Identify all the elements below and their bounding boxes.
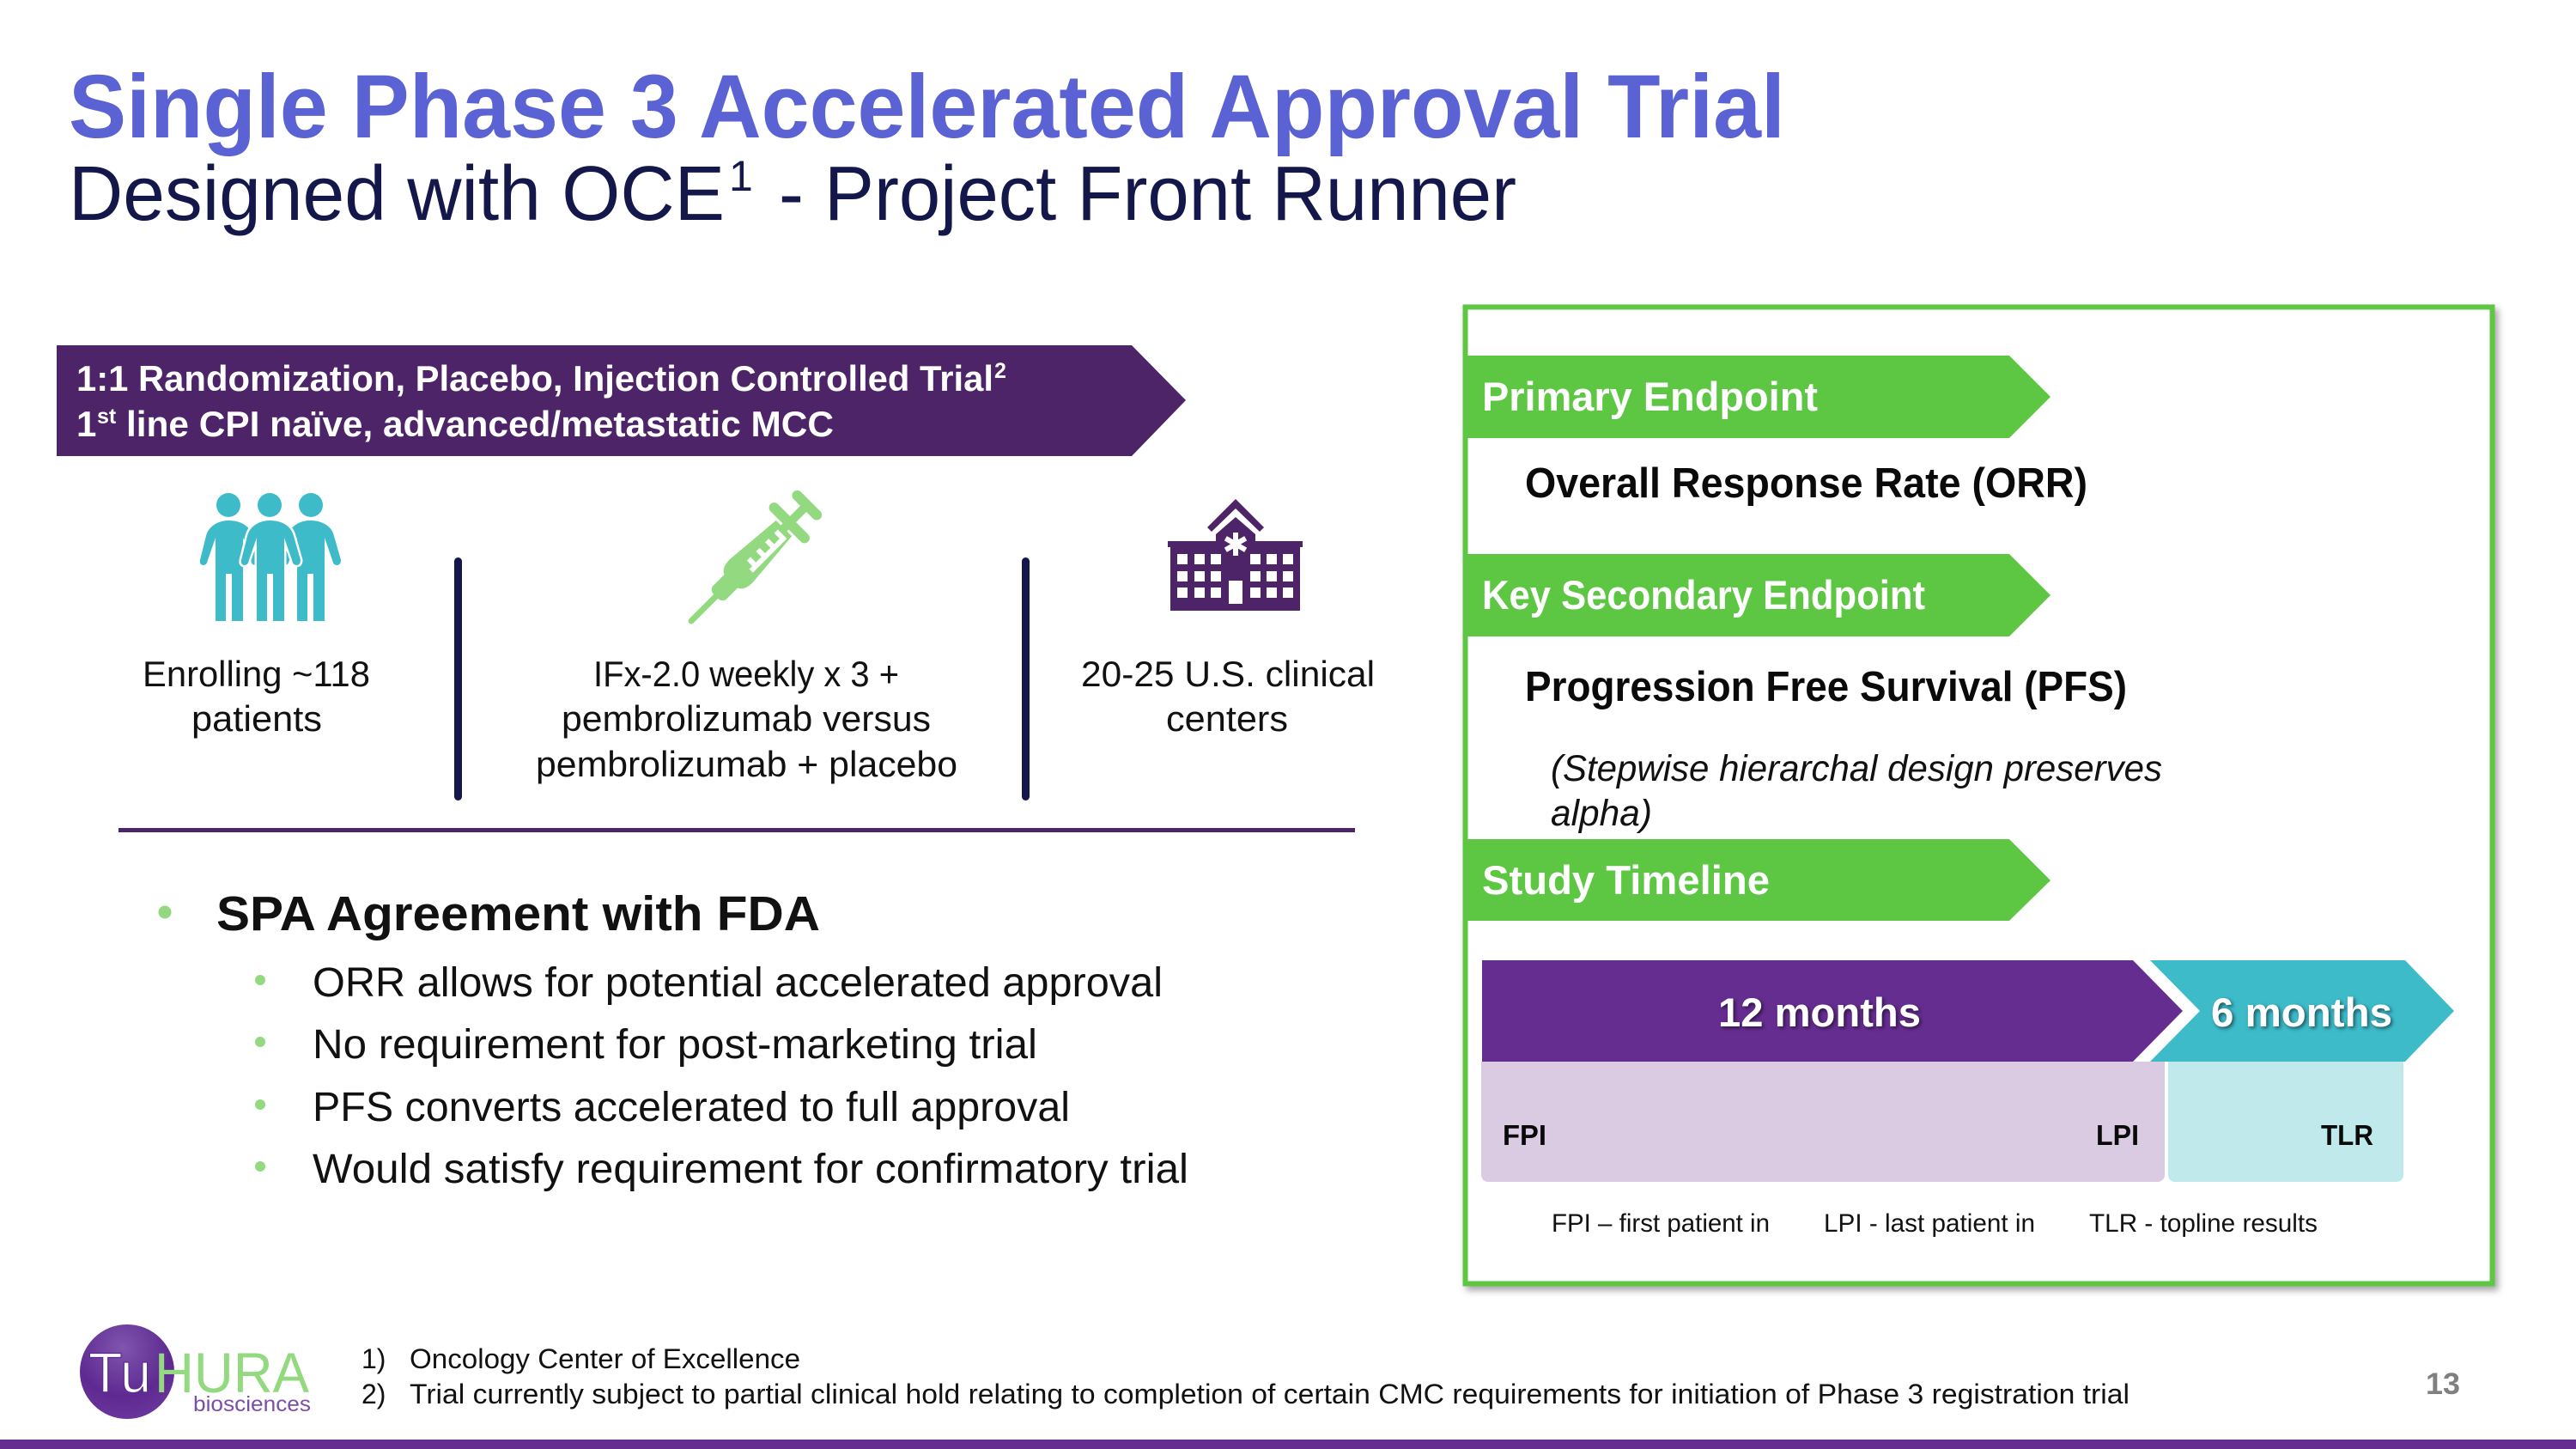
timeline: milestone bands: LPI: [2096, 1119, 2139, 1151]
icon: syringe: [671, 483, 829, 642]
label: treatment: [536, 654, 957, 784]
bullet list: SPA agreement: [158, 886, 1188, 1192]
label: enrolling: [143, 654, 370, 739]
label: enrolling: patients: [191, 698, 322, 739]
footnotes: 2): [361, 1379, 386, 1409]
subtitle: 1: [729, 152, 753, 200]
timeline: 12 months arrow: 12 months: [1718, 989, 1921, 1035]
icon: hospital: [1168, 499, 1303, 611]
bullet list: SPA agreement: PFS converts accelerated to full approval: [313, 1085, 1070, 1130]
secondary endpoint note: alpha): [1551, 793, 1652, 834]
primary endpoint header: Primary Endpoint: [1482, 374, 1818, 419]
timeline legend: TLR - topline results: [2089, 1209, 2318, 1238]
label: centers: 20-25 U.S. clinical: [1081, 654, 1375, 694]
logo: TuHURA biosciences: [80, 1324, 311, 1419]
study timeline header: [1466, 839, 2050, 921]
label: treatment: pembrolizumab + placebo: [536, 744, 957, 784]
primary endpoint text: Overall Response Rate (ORR): [1525, 460, 2087, 507]
title: Single Phase 3 Accelerated Approval Trial: [69, 57, 1785, 157]
banner: trial design: 1: [76, 404, 96, 444]
label: treatment: IFx-2.0 weekly x 3 +: [593, 654, 899, 694]
subtitle: [69, 151, 1516, 237]
timeline: milestone bands: FPI: [1503, 1119, 1546, 1151]
footnotes: Trial currently subject to partial clinical hold relating to completion of certain CMC requirements for initiation of Phase 3 registration trial: [410, 1379, 2129, 1409]
logo: TuHURA biosciences: Tu: [88, 1341, 151, 1404]
subtitle: - Project Front Runner: [779, 151, 1516, 237]
icon: patients: [200, 493, 341, 621]
bullet list: SPA agreement: Would satisfy requirement for confirmatory trial: [313, 1147, 1188, 1192]
footnotes: 1): [361, 1343, 386, 1374]
logo: TuHURA biosciences: biosciences: [193, 1392, 311, 1416]
panel: endpoints and timeline: [1465, 307, 2492, 1283]
label: centers: centers: [1166, 698, 1288, 739]
secondary endpoint header: [1466, 554, 2050, 636]
banner: trial design: [57, 345, 1186, 456]
secondary endpoint text: Progression Free Survival (PFS): [1525, 664, 2127, 710]
label: enrolling: Enrolling ~118: [143, 654, 370, 694]
timeline legend: [1552, 1209, 2318, 1238]
study timeline header: Study Timeline: [1482, 857, 1770, 903]
secondary endpoint header: Key Secondary Endpoint: [1482, 572, 1925, 618]
footnotes: [361, 1343, 2129, 1409]
banner: trial design: 1:1 Randomization, Placebo, Injection Controlled Trial: [76, 358, 993, 399]
banner: trial design: line CPI naïve, advanced/metastatic MCC: [126, 404, 834, 444]
page number: 13: [2426, 1367, 2460, 1401]
footnotes: Oncology Center of Excellence: [410, 1343, 800, 1374]
bullet list: SPA agreement: ORR allows for potential accelerated approval: [313, 960, 1163, 1006]
secondary endpoint note: [1551, 748, 2162, 834]
timeline: milestone bands: TLR: [2321, 1119, 2373, 1151]
secondary endpoint note: (Stepwise hierarchal design preserves: [1551, 748, 2162, 789]
banner: trial design: 2: [994, 359, 1006, 383]
logo: TuHURA biosciences: HURA: [155, 1341, 309, 1404]
banner: trial design: st: [97, 405, 117, 429]
primary endpoint header: [1466, 356, 2050, 438]
timeline legend: LPI - last patient in: [1824, 1209, 2035, 1238]
bullet list: SPA agreement: SPA Agreement with FDA: [216, 886, 820, 941]
timeline: milestone bands: [1481, 1062, 2403, 1182]
label: centers: [1081, 654, 1375, 739]
subtitle: Designed with OCE: [69, 151, 725, 237]
label: treatment: pembrolizumab versus: [562, 698, 931, 739]
timeline: 12 months arrow: [1482, 960, 2183, 1062]
bullet list: SPA agreement: No requirement for post-marketing trial: [313, 1022, 1037, 1068]
timeline: 6 months arrow: 6 months: [2211, 989, 2392, 1035]
timeline legend: FPI – first patient in: [1552, 1209, 1770, 1238]
timeline: 6 months arrow: [2150, 960, 2454, 1062]
